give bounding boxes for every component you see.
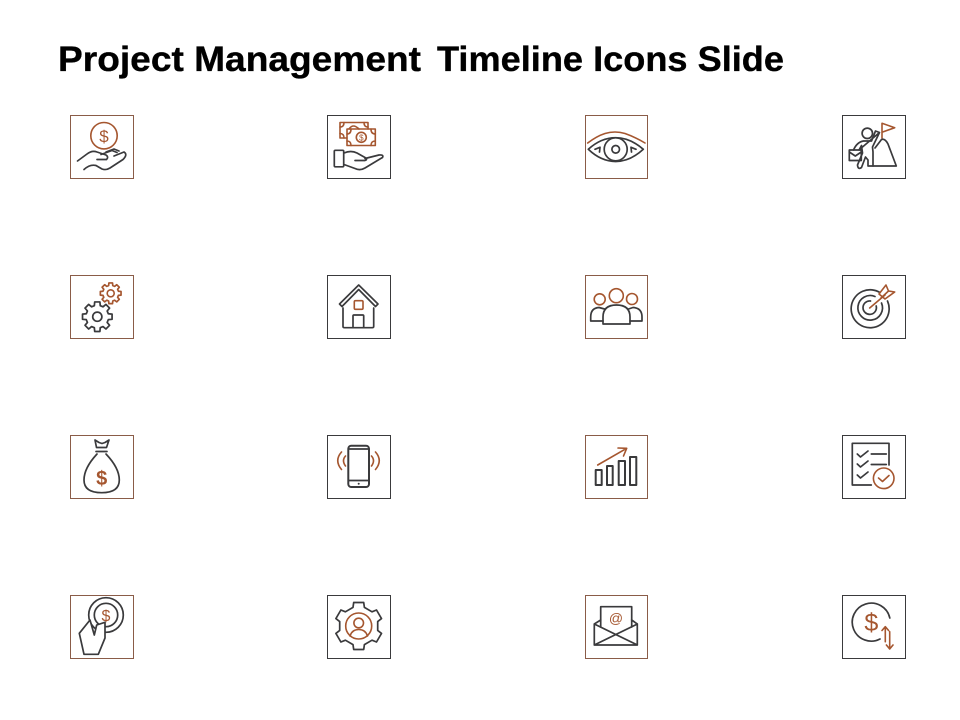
frame — [586, 436, 648, 498]
panel: dollar exchange — [842, 596, 906, 658]
panel: house — [328, 276, 390, 338]
icon: climber on mountain — [849, 123, 896, 168]
title: Timeline Icons Slide — [437, 39, 784, 79]
panel: eye — [586, 116, 648, 178]
frame — [586, 116, 648, 178]
frame — [70, 436, 134, 498]
frame — [842, 276, 906, 338]
panel: target — [842, 276, 906, 338]
panel: climber with flag — [842, 116, 906, 178]
frame — [842, 596, 906, 658]
title: Project Management — [58, 39, 421, 79]
frame — [328, 276, 390, 338]
icon: money bag: $ — [96, 468, 107, 490]
panel: coin over open hand — [70, 116, 134, 178]
icon: house — [340, 285, 378, 328]
title — [58, 39, 784, 79]
icon: envelope with at sign: @ — [609, 610, 623, 626]
panel: team — [586, 276, 648, 338]
frame — [586, 596, 648, 658]
icon: three people — [591, 289, 642, 324]
frame — [328, 436, 390, 498]
frame — [586, 276, 648, 338]
icon: hand with coin: $ — [102, 608, 111, 625]
panel: checklist — [842, 436, 906, 498]
icon: eye — [588, 132, 645, 162]
frame — [328, 116, 390, 178]
frame — [328, 596, 390, 658]
panel: email envelope — [586, 596, 648, 658]
icon: ringing phone — [338, 446, 379, 487]
panel: hand holding coin — [70, 596, 134, 658]
icon: user gear — [336, 602, 382, 650]
frame — [70, 276, 134, 338]
panel: gear with user — [328, 596, 390, 658]
icon: banknotes and hand: $ — [359, 133, 364, 142]
icon: two gears — [83, 283, 121, 331]
icon: coin over hand: $ — [99, 127, 109, 146]
icon: target with arrow — [851, 285, 895, 328]
frame — [70, 596, 134, 658]
panel: phone — [328, 436, 390, 498]
panel: money over hand — [328, 116, 390, 178]
panel: growth chart — [586, 436, 648, 498]
frame — [70, 116, 134, 178]
icon: dollar circle with arrows: $ — [864, 609, 878, 637]
frame — [842, 116, 906, 178]
icon: bar chart with arrow — [596, 448, 636, 485]
panel: money bag — [70, 436, 134, 498]
panel: gears — [70, 276, 134, 338]
icon: checklist — [852, 443, 894, 489]
frame — [842, 436, 906, 498]
